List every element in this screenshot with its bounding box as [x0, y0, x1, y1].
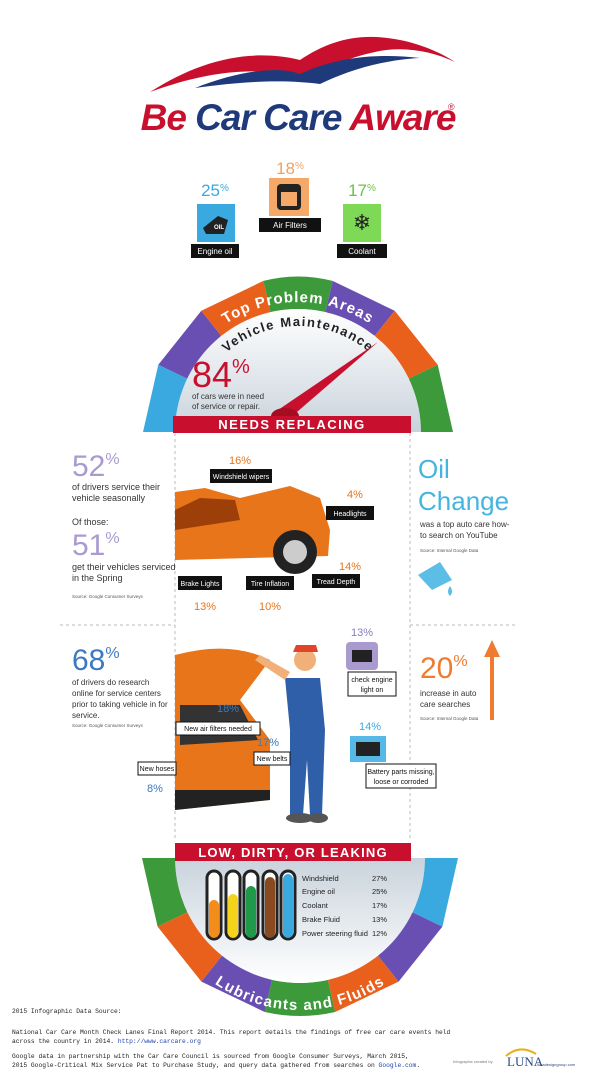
test tubes chart: Brake Fluid: [302, 915, 340, 924]
right icons: engine light / battery: 14%: [359, 721, 381, 733]
sources footer: 2015 Infographic Data Source:: [12, 1008, 122, 1015]
icons top: 18: [276, 159, 295, 178]
oil change: Source: Internal Google Data: [420, 548, 479, 553]
orange car: 10%: [259, 601, 281, 613]
credit: luna design: lunadesigngroup.com: [537, 1062, 576, 1067]
oil change: was a top auto care how-: [419, 520, 510, 529]
orange car: [175, 455, 374, 613]
icons top: %: [295, 161, 304, 172]
sources footer: across the country in 2014. http://www.carcare.org: [12, 1038, 201, 1045]
test tubes chart: [207, 871, 387, 939]
credit: luna design: Infographic created by: [453, 1059, 493, 1064]
icons top: %: [220, 183, 229, 194]
right icons: engine light / battery: check engine: [351, 677, 393, 684]
orange car: Tire Inflation: [251, 581, 289, 588]
oil change: to search on YouTube: [420, 531, 498, 540]
left stats 52/51: [72, 450, 176, 599]
mechanic scene: 8%: [147, 783, 163, 795]
test tubes chart: 25%: [372, 887, 387, 896]
sources footer: 2015 Google-Critical Mix Service Pat to Purchase Study, and query data gathered from searches on Google.com.: [12, 1062, 420, 1069]
20%: care searches: [420, 700, 470, 709]
mechanic scene: 18%: [217, 703, 239, 715]
credit: luna design: LUNA: [507, 1054, 544, 1069]
banner needs replacing: [173, 416, 411, 433]
orange car: Brake Lights: [181, 581, 220, 588]
orange car: Headlights: [333, 511, 367, 518]
left stats 52/51: 52: [72, 450, 105, 483]
right icons: engine light / battery: 13%: [351, 627, 373, 639]
icons top: 25: [201, 181, 220, 200]
test tubes chart: Power steering fluid: [302, 929, 368, 938]
gauge: top problem areas: Vehicle Maintenance: [221, 316, 372, 350]
left stats 52/51: Source: Google Consumer Surveys: [72, 594, 144, 599]
orange car: Tread Depth: [317, 579, 355, 586]
left stats 52/51: 51: [72, 529, 105, 562]
68%: service.: [72, 711, 100, 720]
icons top: Air Filters: [273, 221, 307, 230]
test tubes chart: Engine oil: [302, 887, 335, 896]
left stats 52/51: of drivers service their: [72, 482, 160, 492]
orange car: Windshield wipers: [213, 474, 270, 481]
logo: ®: [448, 102, 455, 112]
sources footer: [12, 1008, 451, 1069]
gauge: top problem areas: of service or repair.: [192, 402, 260, 411]
68%: %: [105, 645, 120, 662]
orange car: 13%: [194, 601, 216, 613]
20%: 20: [420, 652, 453, 685]
test tubes chart: Windshield: [302, 874, 339, 883]
20%: %: [453, 653, 468, 670]
icons top: OIL: [214, 225, 224, 231]
oil change: Change: [418, 486, 509, 516]
68%: 68: [72, 644, 105, 677]
right icons: engine light / battery: light on: [361, 687, 383, 694]
test tubes chart: 17%: [372, 901, 387, 910]
right icons: engine light / battery: loose or corroded: [374, 779, 428, 786]
sources footer: Google data in partnership with the Car Care Council is sourced from Google Consumer Surveys, March 2015,: [12, 1053, 409, 1060]
icons top: %: [367, 183, 376, 194]
oil change: Oil: [418, 454, 450, 484]
icons top: ❄: [353, 210, 371, 235]
left stats 52/51: vehicle seasonally: [72, 493, 146, 503]
gauge: top problem areas: Top Problem Areas: [220, 291, 372, 322]
test tubes chart: Coolant: [302, 901, 329, 910]
20%: increase in auto: [420, 689, 477, 698]
banner needs replacing: NEEDS REPLACING: [218, 417, 366, 432]
gauge: top problem areas: [143, 276, 453, 432]
test tubes chart: 27%: [372, 874, 387, 883]
oil change: [418, 454, 510, 596]
84%: %: [232, 356, 250, 378]
left stats 52/51: Of those:: [72, 517, 109, 527]
20%: [420, 640, 500, 721]
68%: prior to taking vehicle in for: [72, 700, 168, 709]
orange car: 14%: [339, 561, 361, 573]
test tubes chart: 13%: [372, 915, 387, 924]
bottom gauge: lubricants and fluids: Lubricants and Fluids: [215, 976, 384, 1010]
mechanic scene: 17%: [257, 737, 279, 749]
68%: of drivers do research: [72, 678, 149, 687]
68%: Source: Google Consumer Surveys: [72, 723, 144, 728]
icons top: [191, 159, 387, 258]
sources footer: National Car Care Month Check Lanes Final Report 2014. This report details the findings of free car care events held: [12, 1029, 451, 1036]
bottom gauge: lubricants and fluids: [142, 858, 458, 1016]
banner low dirty leaking: LOW, DIRTY, OR LEAKING: [198, 845, 388, 860]
84%: 84: [192, 354, 232, 395]
logo: [141, 37, 456, 138]
credit: luna design: [453, 1049, 576, 1069]
logo: Be Car Care Aware: [141, 97, 456, 138]
mechanic scene: New belts: [257, 756, 288, 763]
68%: [72, 644, 168, 728]
orange car: 16%: [229, 455, 251, 467]
20%: Source: Internal Google Data: [420, 716, 479, 721]
mechanic scene: New air filters needed: [184, 726, 252, 733]
banner low dirty leaking: [175, 843, 411, 861]
68%: online for service centers: [72, 689, 161, 698]
left stats 52/51: in the Spring: [72, 573, 123, 583]
icons top: Coolant: [348, 247, 377, 256]
right icons: engine light / battery: [346, 627, 436, 788]
icons top: 17: [348, 181, 367, 200]
icons top: Engine oil: [197, 247, 233, 256]
gauge: top problem areas: of cars were in need: [192, 392, 264, 401]
right icons: engine light / battery: Battery parts missing,: [367, 769, 435, 776]
orange car: 4%: [347, 489, 363, 501]
mechanic scene: [138, 645, 328, 823]
test tubes chart: 12%: [372, 929, 387, 938]
left stats 52/51: %: [105, 530, 120, 547]
left stats 52/51: %: [105, 451, 120, 468]
mechanic scene: New hoses: [140, 766, 175, 773]
needle: [278, 342, 378, 418]
left stats 52/51: get their vehicles serviced: [72, 562, 176, 572]
